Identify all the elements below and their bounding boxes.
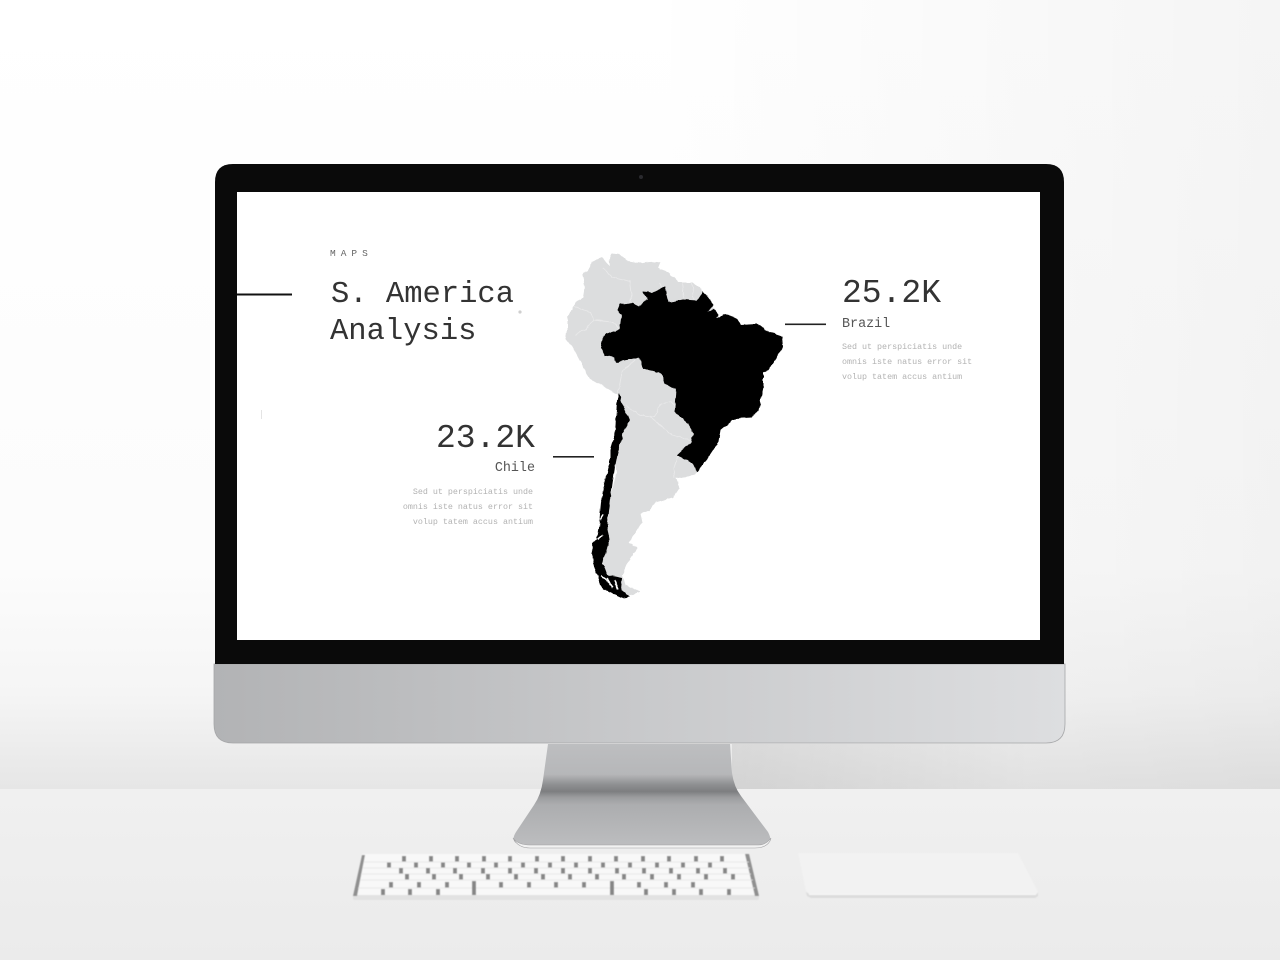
Brazil value: 25.2K — [842, 275, 941, 312]
Chile description — [403, 487, 533, 527]
keyboard key gaps — [381, 856, 735, 895]
callout: Brazil — [785, 275, 972, 382]
map: Brazil — [601, 287, 783, 472]
Brazil label: Brazil — [842, 317, 890, 332]
Brazil connector line — [785, 324, 826, 325]
monitor bezel — [215, 164, 1064, 664]
Chile connector line — [553, 456, 594, 458]
map: South America — [566, 254, 783, 598]
Chile description: volup tatem accus antium — [413, 517, 533, 527]
slide accent line — [237, 294, 292, 296]
Brazil description: volup tatem accus antium — [842, 372, 962, 382]
eyebrow: MAPS: MAPS — [330, 248, 373, 259]
map: grey countries — [566, 254, 720, 596]
monitor — [214, 164, 1065, 743]
small speck left — [261, 410, 262, 419]
title: Analysis — [330, 315, 476, 349]
Chile value: 23.2K — [436, 420, 535, 457]
map: Chile fjord cuts — [598, 515, 618, 590]
speck island — [518, 310, 522, 314]
map: Chile — [592, 394, 630, 598]
screen — [237, 192, 1040, 640]
monitor stand — [513, 744, 771, 848]
keyboard — [353, 854, 759, 900]
callout: Chile — [403, 420, 594, 527]
trackpad — [798, 853, 1038, 898]
Brazil description: omnis iste natus error sit — [842, 357, 972, 367]
camera — [639, 175, 643, 179]
Brazil description — [842, 342, 972, 382]
Chile description: Sed ut perspiciatis unde — [413, 487, 533, 497]
Chile label: Chile — [495, 461, 535, 476]
title — [330, 278, 514, 349]
map: country borders — [574, 268, 694, 478]
monitor chin — [214, 664, 1065, 743]
Brazil description: Sed ut perspiciatis unde — [842, 342, 962, 352]
title: S. America — [331, 278, 514, 312]
Chile description: omnis iste natus error sit — [403, 502, 533, 512]
